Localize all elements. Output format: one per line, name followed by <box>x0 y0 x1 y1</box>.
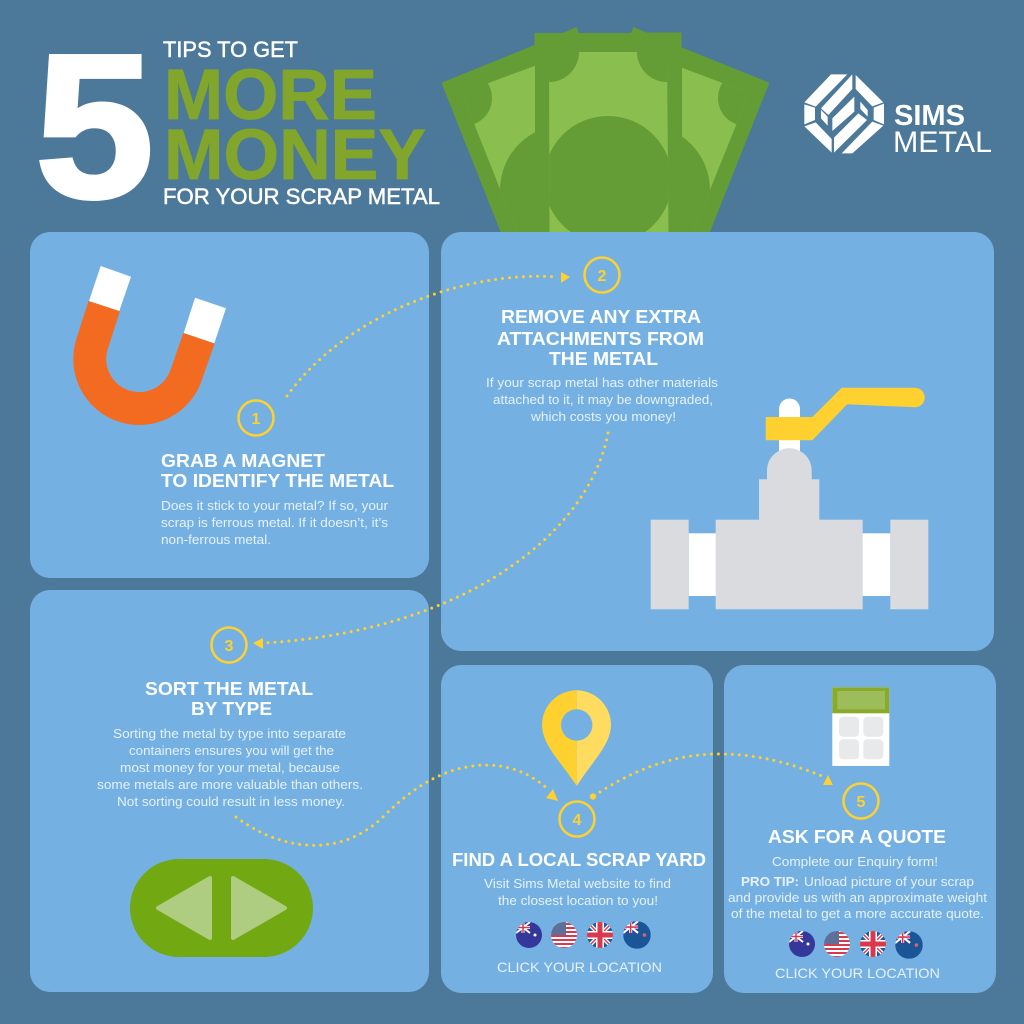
logo: Sims Metal <box>804 74 992 159</box>
number badge 5: 5 <box>857 794 866 811</box>
title: 5 <box>35 12 154 241</box>
text: tip 5 body: PRO TIP: <box>741 874 799 889</box>
text: tip 5 body <box>728 854 987 921</box>
text: tip 3 body: Sorting the metal by type into separate <box>113 726 346 741</box>
panel: tip 5 <box>724 665 996 993</box>
title: FOR YOUR SCRAP METAL <box>163 184 440 209</box>
text: tip 1 body <box>161 498 389 547</box>
number badge 3: 3 <box>225 638 234 655</box>
number badge 2: 2 <box>598 268 607 285</box>
icon: calculator <box>832 687 889 766</box>
heading: tip 2: THE METAL <box>549 348 658 369</box>
arrow: tip 1 to tip 2 <box>287 272 570 396</box>
heading: tip 2: ATTACHMENTS FROM <box>497 328 704 349</box>
text: tip 3 body: most money for your metal, because <box>120 760 340 775</box>
text: tip 3 body: some metals are more valuable than others. <box>97 777 363 792</box>
number badge 2 <box>584 258 620 292</box>
panel: tip 1 <box>30 232 429 578</box>
illustration: banknotes <box>442 27 770 232</box>
text: tip 1 body: Does it stick to your metal? If so, your <box>161 498 389 513</box>
number badge 4 <box>560 802 594 836</box>
flags: tip 4 locations <box>516 921 651 949</box>
heading: tip 5: ASK FOR A QUOTE <box>768 826 946 847</box>
heading: tip 2 <box>497 306 704 369</box>
heading: tip 3 <box>145 678 313 719</box>
heading: tip 1 <box>161 450 394 491</box>
icon: valve <box>651 388 928 609</box>
heading: tip 4: FIND A LOCAL SCRAP YARD <box>452 849 706 870</box>
logo: Sims Metal: SIMS <box>894 100 965 132</box>
text: tip 3 body <box>97 726 363 809</box>
heading: tip 3: BY TYPE <box>191 698 272 719</box>
heading: tip 2: REMOVE ANY EXTRA <box>501 306 701 327</box>
panel: tip 3 <box>30 590 429 992</box>
text: tip 1 body: scrap is ferrous metal. If it doesn’t, it’s <box>161 515 388 530</box>
number badge 1: 1 <box>252 411 261 428</box>
title: MORE <box>164 56 377 135</box>
arrow: tip 2 to tip 3 <box>253 433 608 649</box>
title: TIPS TO GET <box>163 37 298 62</box>
heading: tip 1: GRAB A MAGNET <box>161 450 326 471</box>
text: tip 4 body: the closest location to you! <box>498 893 658 908</box>
logo: Sims Metal: METAL <box>893 126 992 159</box>
flags: tip 5 locations <box>789 931 923 959</box>
number badge 1 <box>238 400 274 436</box>
panel: tip 2 <box>441 232 994 651</box>
number badge 5 <box>844 784 878 818</box>
link text: tip 5: CLICK YOUR LOCATION <box>775 965 940 981</box>
text: tip 3 body: Not sorting could result in less money. <box>117 794 345 809</box>
number badge 4: 4 <box>573 812 582 829</box>
link text: tip 4: CLICK YOUR LOCATION <box>497 959 662 975</box>
text: tip 3 body: containers ensures you will get the <box>129 743 334 758</box>
text: tip 1 body: non-ferrous metal. <box>161 532 271 547</box>
text: tip 5 body: of the metal to get a more accurate quote. <box>731 906 984 921</box>
text: tip 5 body: Unload picture of your scrap <box>804 874 974 889</box>
title: MONEY <box>164 116 426 195</box>
icon: magnet <box>89 266 226 409</box>
text: tip 5 body: and provide us with an approximate weight <box>728 890 987 905</box>
text: tip 4 body <box>484 876 671 908</box>
icon: location pin <box>542 690 611 786</box>
number badge 3 <box>212 628 246 662</box>
text: tip 2 body <box>486 375 718 424</box>
text: tip 2 body: If your scrap metal has other materials <box>486 375 718 390</box>
text: tip 2 body: attached to it, it may be downgraded, <box>493 392 713 407</box>
arrow: tip 4 to tip 5 <box>590 754 833 800</box>
panel: tip 4 <box>441 665 713 993</box>
text: tip 2 body: which costs you money! <box>530 409 676 424</box>
heading: tip 3: SORT THE METAL <box>145 678 313 699</box>
text: tip 5 body: Complete our Enquiry form! <box>772 854 938 869</box>
arrow: tip 3 to tip 4 <box>236 765 558 845</box>
heading: tip 1: TO IDENTIFY THE METAL <box>161 470 394 491</box>
text: tip 4 body: Visit Sims Metal website to find <box>484 876 671 891</box>
icon: sorting arrows pill <box>130 859 313 957</box>
title <box>35 12 440 241</box>
